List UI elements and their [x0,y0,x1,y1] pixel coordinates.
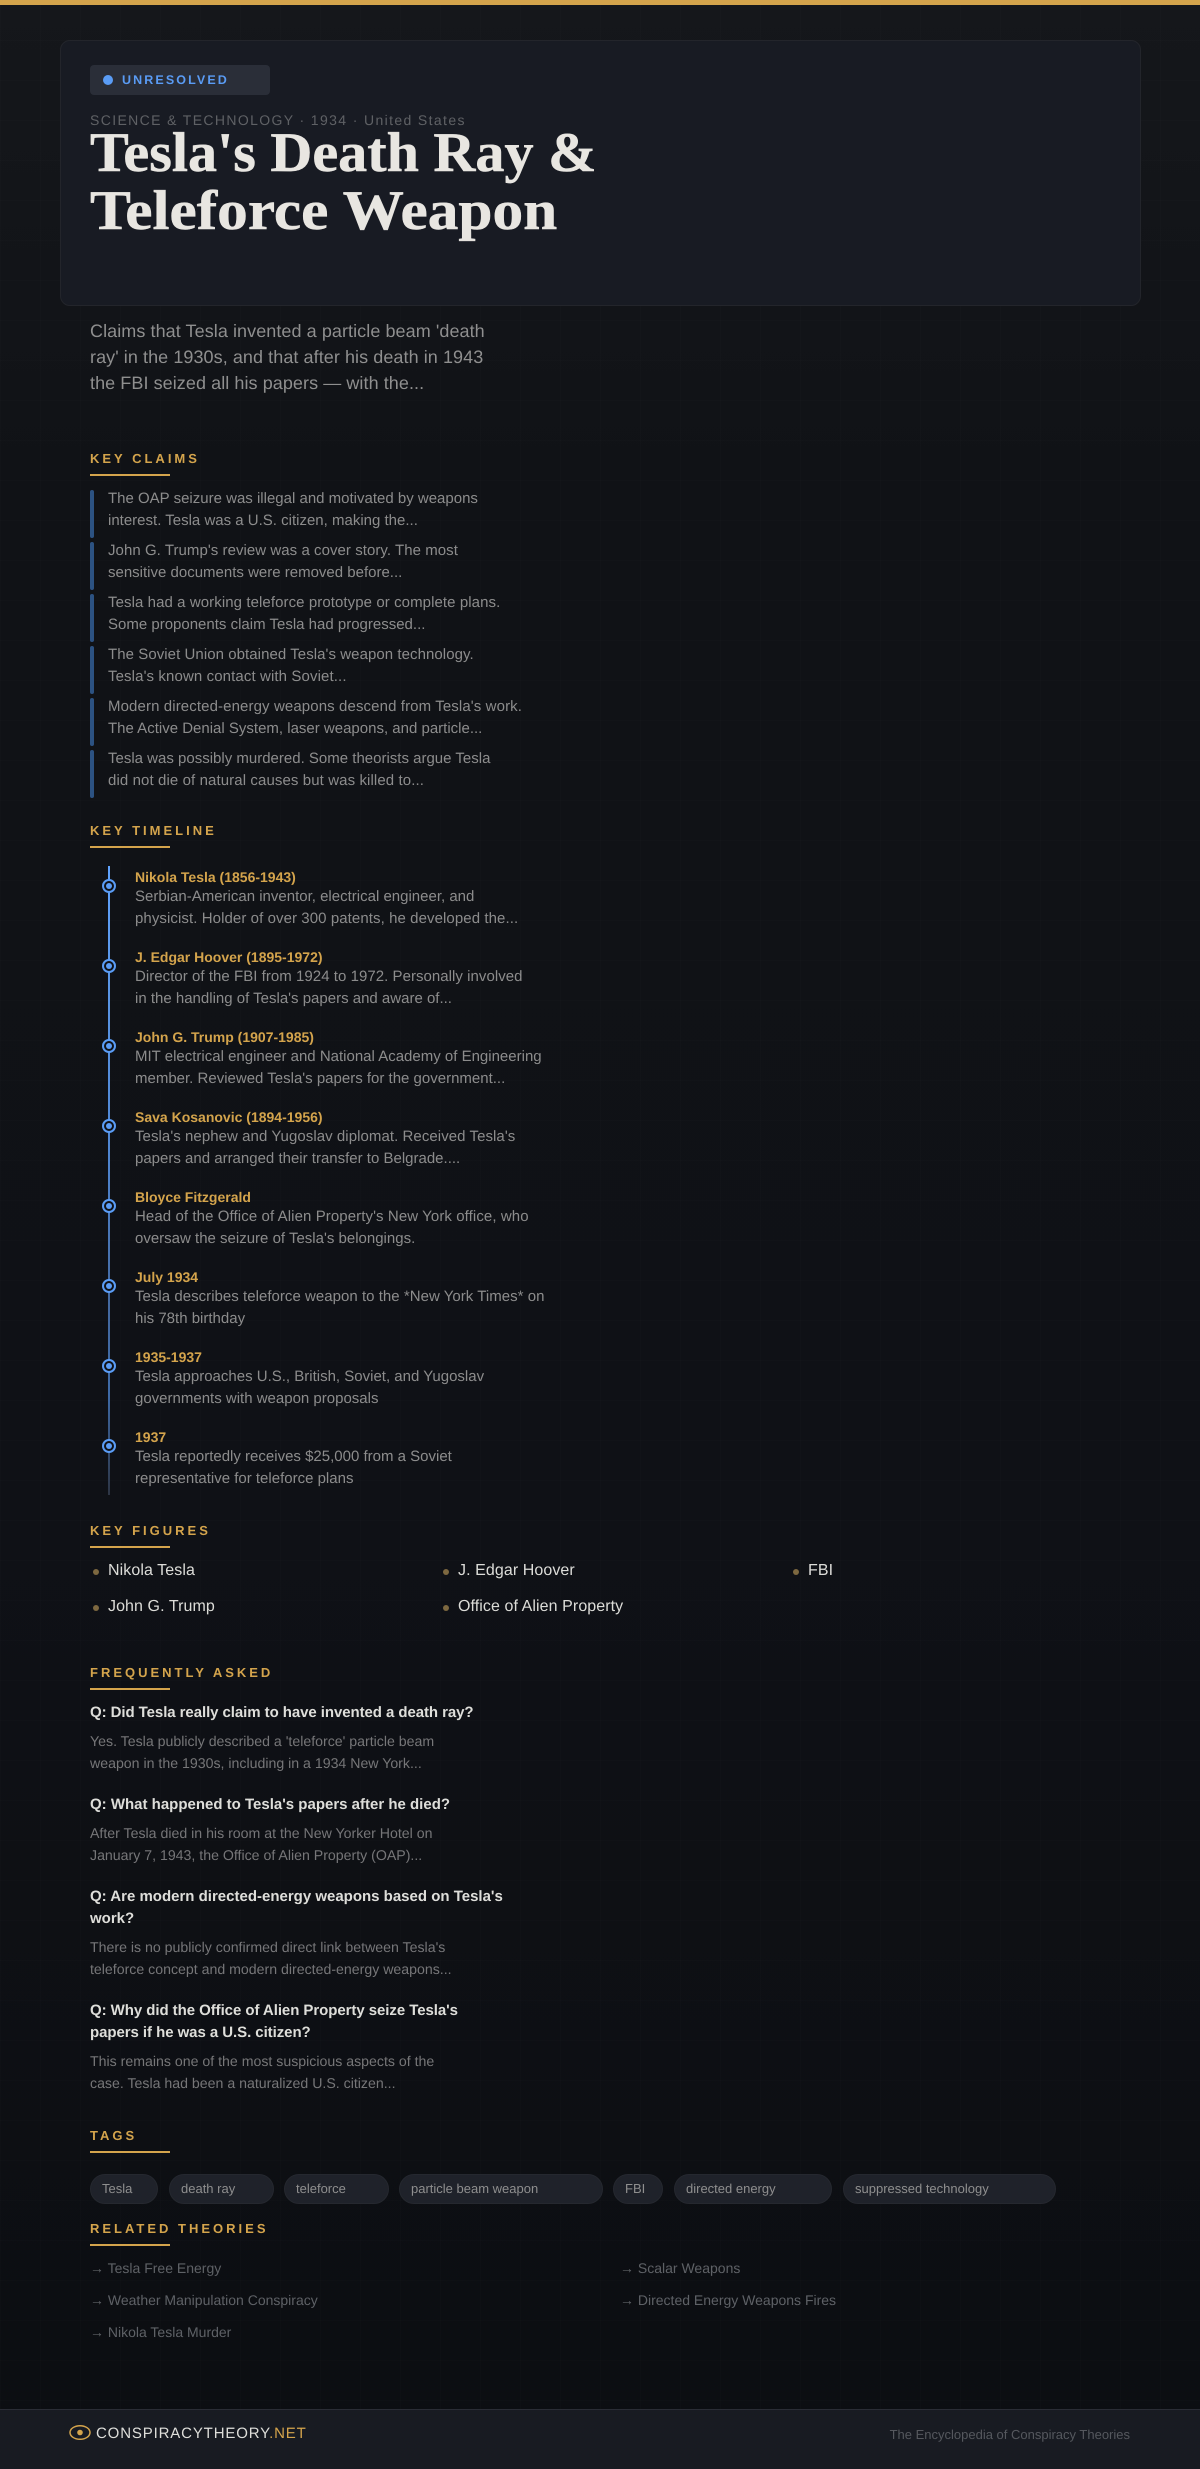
timeline dot 2 [102,959,116,973]
event 2: J. Edgar Hoover (1895-1972) [135,949,323,965]
claim 5: Modern directed-energy weapons descend from Tesla's work. [108,698,522,715]
event 5: Head of the Office of Alien Property's New York office, who [135,1208,529,1225]
claim 3: Some proponents claim Tesla had progressed... [108,616,425,633]
event 8 [135,1429,452,1487]
FAQ 2 [90,1796,450,1863]
claim 1 [90,490,478,538]
tag: Tesla [90,2174,158,2204]
event 7: 1935-1937 [135,1349,202,1365]
claim 3 [90,594,500,642]
claim 4: The Soviet Union obtained Tesla's weapon technology. [108,646,474,663]
claim 5: The Active Denial System, laser weapons, and particle... [108,720,482,737]
link: Scalar Weapons: → Scalar Weapons [620,2260,740,2276]
footer tagline: The Encyclopedia of Conspiracy Theories [890,2427,1130,2442]
tag: death ray [169,2174,274,2204]
tag: particle beam weapon [399,2174,603,2204]
FAQ 1 [90,1704,474,1771]
tag: particle beam weapon: particle beam weapon [411,2181,538,2196]
tag: Tesla: Tesla [102,2181,132,2196]
heading: frequently asked: FREQUENTLY ASKED [90,1665,273,1680]
panel: hero card [60,40,1141,306]
event 3 [135,1029,542,1087]
icon: status dot [103,75,113,85]
tag: FBI [613,2174,663,2204]
title: Teleforce Weapon [90,180,557,242]
summary text: Claims that Tesla invented a particle beam 'death [90,321,485,341]
event 6: Tesla describes teleforce weapon to the *New York Times* on [135,1288,544,1305]
claim 3: Tesla had a working teleforce prototype or complete plans. [108,594,500,611]
event 3: member. Reviewed Tesla's papers for the government... [135,1070,505,1087]
timeline dot 7 [102,1359,116,1373]
tag: directed energy: directed energy [686,2181,776,2196]
claim 1: The OAP seizure was illegal and motivated by weapons [108,490,478,507]
heading: tags: TAGS [90,2128,137,2143]
tag: suppressed technology [843,2174,1056,2204]
event 7: governments with weapon proposals [135,1390,378,1407]
figure: J. Edgar Hoover: J. Edgar Hoover [458,1562,575,1579]
badge label: UNRESOLVED [122,73,229,87]
meta line: SCIENCE & TECHNOLOGY · 1934 · United States [90,112,466,128]
panel: key figures [93,1562,833,1615]
summary text [90,321,485,393]
claim 4 [90,646,474,694]
FAQ 1: Yes. Tesla publicly described a 'teleforce' particle beam [90,1733,434,1749]
timeline dot 5 [102,1199,116,1213]
tag: death ray: death ray [181,2181,235,2196]
event 8: 1937 [135,1429,166,1445]
timeline dot 3 [102,1039,116,1053]
tag: teleforce: teleforce [296,2181,346,2196]
event 4: Sava Kosanovic (1894-1956) [135,1109,323,1125]
heading: related theories: RELATED THEORIES [90,2221,268,2236]
claim 6: did not die of natural causes but was killed to... [108,772,424,789]
related theories list [90,2260,836,2340]
heading: key timeline: KEY TIMELINE [90,823,217,838]
event 4: Tesla's nephew and Yugoslav diplomat. Received Tesla's [135,1128,515,1145]
timeline [108,866,110,1495]
tag list [90,2174,1056,2204]
event 3: John G. Trump (1907-1985) [135,1029,314,1045]
event 1 [135,869,518,927]
timeline rail [108,866,110,1495]
event 4: papers and arranged their transfer to Belgrade.... [135,1150,460,1167]
heading: key claims: KEY CLAIMS [90,451,200,466]
FAQ 2: January 7, 1943, the Office of Alien Property (OAP)... [90,1847,422,1863]
claim 2 [90,542,458,590]
figure: Office of Alien Property: Office of Alien Property [458,1598,623,1615]
summary text: ray' in the 1930s, and that after his death in 1943 [90,347,483,367]
icon: eye logo [69,2425,91,2440]
timeline dot 1 [102,879,116,893]
timeline dot 6 [102,1279,116,1293]
tag: FBI: FBI [625,2181,645,2196]
event 2: Director of the FBI from 1924 to 1972. Personally involved [135,968,523,985]
event 1: physicist. Holder of over 300 patents, he developed the... [135,910,518,927]
claim 4: Tesla's known contact with Soviet... [108,668,347,685]
event 8: Tesla reportedly receives $25,000 from a Soviet [135,1448,452,1465]
footer [0,2409,1200,2469]
event 3: MIT electrical engineer and National Academy of Engineering [135,1048,542,1065]
title: Tesla's Death Ray & [90,122,596,184]
claim 5 [90,698,522,746]
event 7: Tesla approaches U.S., British, Soviet, and Yugoslav [135,1368,484,1385]
summary text: the FBI seized all his papers — with the... [90,373,424,393]
FAQ 3: teleforce concept and modern directed-energy weapons... [90,1961,452,1977]
link: Nikola Tesla Murder: → Nikola Tesla Murder [90,2324,231,2340]
FAQ 3: Q: Are modern directed-energy weapons based on Tesla's [90,1888,503,1905]
event 6 [135,1269,544,1327]
event 2: in the handling of Tesla's papers and aware of... [135,990,452,1007]
tag: suppressed technology: suppressed technology [855,2181,989,2196]
title [90,122,596,242]
FAQ 4: case. Tesla had been a naturalized U.S. citizen... [90,2075,396,2091]
badge: unresolved status [90,65,270,95]
top accent bar [0,0,1200,5]
link: Tesla Free Energy: → Tesla Free Energy [90,2260,221,2276]
timeline dot 8 [102,1439,116,1453]
event 5 [135,1189,529,1247]
FAQ 3 [90,1888,503,1977]
event 8: representative for teleforce plans [135,1470,353,1487]
event 5: oversaw the seizure of Tesla's belongings. [135,1230,415,1247]
event 2 [135,949,523,1007]
FAQ 4 [90,2002,458,2091]
event 7 [135,1349,484,1407]
claim 6 [90,750,490,798]
claim 2: sensitive documents were removed before... [108,564,402,581]
figure: John G. Trump: John G. Trump [108,1598,215,1615]
figure: FBI [793,1562,833,1579]
claim 1: interest. Tesla was a U.S. citizen, making the... [108,512,418,529]
figure: Nikola Tesla: Nikola Tesla [108,1562,195,1579]
FAQ 3: work? [90,1910,134,1927]
link: Weather Manipulation Conspiracy: → Weather Manipulation Conspiracy [90,2292,318,2308]
claim 2: John G. Trump's review was a cover story. The most [108,542,458,559]
tag: teleforce [284,2174,389,2204]
event 5: Bloyce Fitzgerald [135,1189,251,1205]
event 4 [135,1109,515,1167]
link: Directed Energy Weapons Fires: → Directed Energy Weapons Fires [620,2292,836,2308]
timeline dot 4 [102,1119,116,1133]
heading: key figures: KEY FIGURES [90,1523,211,1538]
FAQ 1: weapon in the 1930s, including in a 1934 New York... [90,1755,422,1771]
claim 6: Tesla was possibly murdered. Some theorists argue Tesla [108,750,490,767]
panel: key claims list [90,490,522,798]
logo wordmark: CONSPIRACYTHEORY.NET [96,2425,307,2442]
FAQ 2: After Tesla died in his room at the New Yorker Hotel on [90,1825,432,1841]
event 6: his 78th birthday [135,1310,245,1327]
FAQ 4: Q: Why did the Office of Alien Property seize Tesla's [90,2002,458,2019]
FAQ 4: This remains one of the most suspicious aspects of the [90,2053,434,2069]
FAQ 2: Q: What happened to Tesla's papers after he died? [90,1796,450,1813]
FAQ 3: There is no publicly confirmed direct link between Tesla's [90,1939,445,1955]
event 1: Serbian-American inventor, electrical engineer, and [135,888,474,905]
FAQ 4: papers if he was a U.S. citizen? [90,2024,311,2041]
figure: FBI: FBI [808,1562,833,1579]
event 1: Nikola Tesla (1856-1943) [135,869,296,885]
event 6: July 1934 [135,1269,198,1285]
FAQ 1: Q: Did Tesla really claim to have invented a death ray? [90,1704,474,1721]
tag: directed energy [674,2174,832,2204]
